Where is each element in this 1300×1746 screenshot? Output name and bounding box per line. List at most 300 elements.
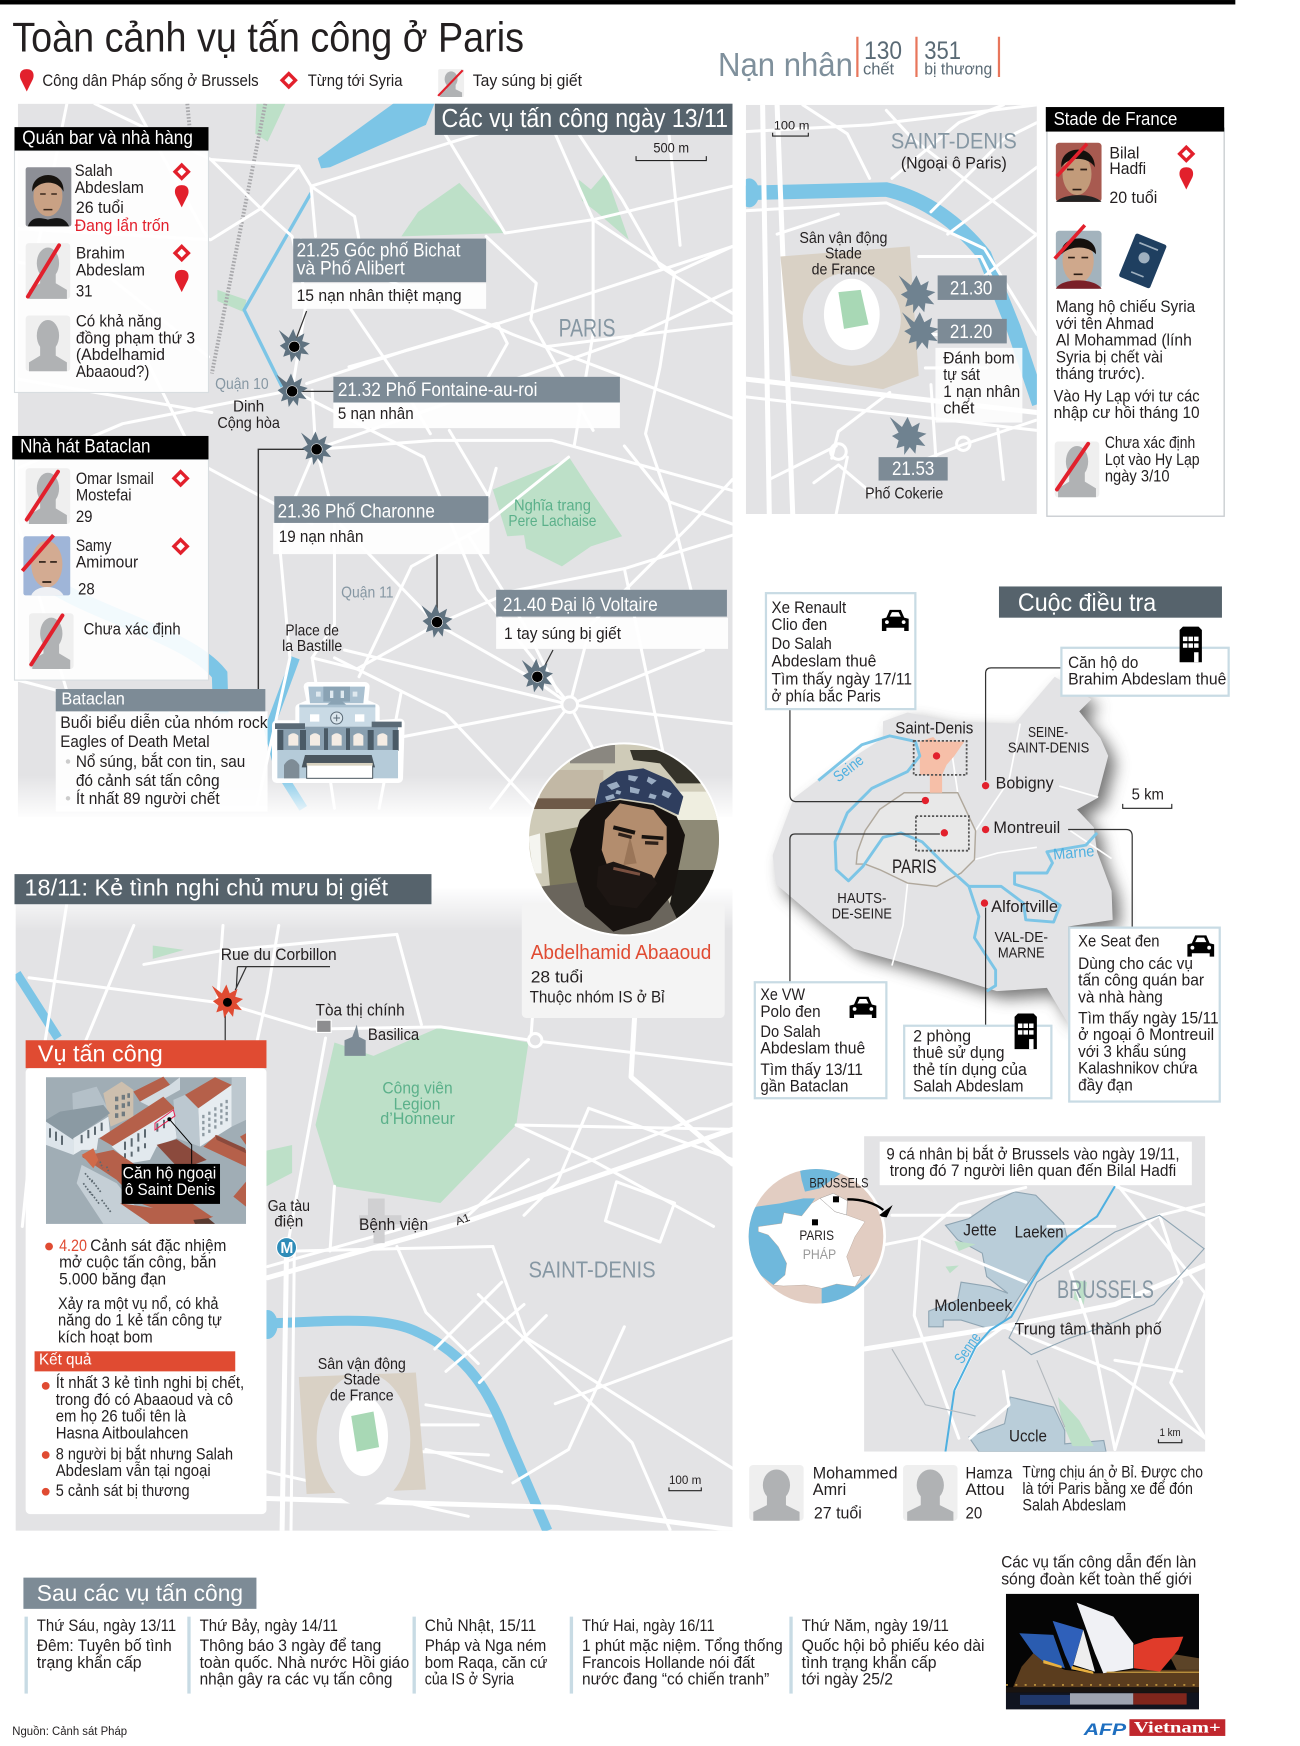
photo: Salah Abdeslam [26, 167, 71, 226]
Rue du Corbillon blast: Rue du Corbillon [221, 945, 337, 964]
photo: Abaaoud [527, 742, 723, 940]
text: Salah Abdeslam: Salah [75, 161, 113, 180]
timeline: Monday: Francois Hollande nói đất [582, 1653, 755, 1672]
labels: Sân vận động [799, 230, 887, 247]
locator globe: BRUSSELS [809, 1174, 869, 1190]
scale 500 m: 500 m [653, 141, 689, 156]
panel: Brussels map [864, 1136, 1205, 1452]
text: passport: Vào Hy Lạp với tư các [1054, 386, 1200, 405]
source: Nguồn: Cảnh sát Pháp [12, 1724, 127, 1738]
text: results: Ít nhất 3 kẻ tình nghi bị chết, [56, 1373, 244, 1392]
name and details: Thuộc nhóm IS ở Bỉ [530, 987, 665, 1006]
labels: Phố Cokerie [865, 485, 943, 502]
panel: bars and restaurants: Quán bar và nhà hàng [22, 128, 193, 149]
blast marker 5 [522, 659, 553, 692]
text: passport: nhập cư hồi tháng 10 [1054, 403, 1200, 422]
subheading: results [35, 1351, 235, 1371]
victims counter: bị thương [924, 60, 992, 79]
panel: Stade de France attackers: Stade de France [1054, 108, 1177, 129]
text: unidentified: ngày 3/10 [1105, 467, 1170, 486]
silhouette: unidentified [1055, 442, 1099, 497]
text: results: Hasna Aitboulahcen [56, 1423, 188, 1442]
text: unidentified: Lọt vào Hy Lạp [1105, 450, 1200, 469]
panel: Bataclan theatre attackers [12, 436, 208, 680]
labels on Saint-Denis map: d’Honneur [380, 1109, 455, 1128]
heading: after the attacks: Sau các vụ tấn công [37, 1580, 243, 1606]
person: Hamza Attou: Hamza [966, 1463, 1013, 1482]
caption: solidarity: sóng đoàn kết toàn thế giới [1001, 1569, 1192, 1588]
icon: metro [277, 1238, 297, 1258]
blast marker 4 [421, 604, 453, 638]
labels: Stade [825, 246, 862, 263]
callout: suicide bombing: chết [943, 399, 975, 418]
logo: AFP Vietnam+ [1082, 1719, 1225, 1739]
labels on Saint-Denis map [268, 1001, 656, 1404]
text: passport: Syria bị chết vài [1056, 347, 1163, 366]
labels: (Ngoại ô Paris) [901, 153, 1007, 172]
blast markers [890, 275, 939, 455]
callout: 21.32: 21.32 Phố Fontaine-au-roi [338, 380, 537, 401]
labels on Saint-Denis map: Stade [343, 1372, 380, 1389]
name and details: 28 tuổi [531, 967, 583, 986]
note: arrests [880, 1142, 1192, 1185]
text: third accomplice: (Abdelhamid [76, 345, 165, 364]
icon: Syria diamond [282, 74, 295, 87]
callout: Bataclan: đó cảnh sát tấn công [76, 771, 220, 790]
labels on Saint-Denis map: điện [274, 1213, 303, 1230]
text: Omar: Mostefai [76, 486, 132, 505]
photo: Sydney Opera House [1006, 1594, 1199, 1709]
labels: Uccle [1009, 1427, 1047, 1446]
illustration: apartment building: ô Saint Denis [125, 1180, 215, 1199]
timeline: Friday [25, 1616, 176, 1694]
map labels: Bobigny [996, 773, 1054, 792]
map labels: PARIS [892, 857, 937, 878]
map labels: PARIS [559, 316, 615, 343]
time labels [879, 275, 1007, 481]
text: passport: tháng trước). [1056, 364, 1145, 383]
text: unidentified: Chưa xác định [1105, 433, 1195, 452]
timeline: Thursday: Quốc hội bỏ phiếu kéo dài [802, 1636, 984, 1655]
text: unidentified: Chưa xác định [84, 619, 181, 638]
timeline: Saturday: Thứ Bảy, ngày 14/11 [200, 1616, 338, 1635]
silhouette: Brahim [26, 243, 70, 299]
callout: suicide bombing: Đánh bom [943, 348, 1015, 367]
timeline: Sunday: Pháp và Nga ném [425, 1636, 546, 1655]
scale 100 m: 100 m [774, 118, 809, 132]
text: results: em họ 26 tuổi tên là [56, 1407, 187, 1426]
person: Mohammed Amri [749, 1463, 898, 1523]
text: Bilal Hadfi: 20 tuổi [1109, 188, 1157, 207]
person: Mohammed Amri: 27 tuổi [814, 1504, 862, 1523]
person: Hamza Attou: Attou [966, 1480, 1005, 1499]
text: Brahim: Brahim [76, 244, 125, 263]
victims counter [718, 37, 999, 84]
heading: 18/11: 18/11: Kẻ tình nghi chủ mưu bị giết [25, 874, 388, 900]
timeline: Saturday: toàn quốc. Nhà nước Hồi giáo [200, 1653, 409, 1672]
labels on Saint-Denis map: Ga tàu [268, 1198, 310, 1215]
panel: the raid [26, 1040, 266, 1514]
timeline: Saturday: nhận gây ra các vụ tấn công [200, 1670, 392, 1689]
callout: Renault Clio: ở phía bắc Paris [772, 686, 881, 705]
text: police raid [45, 1236, 226, 1346]
timeline: Sunday [413, 1616, 547, 1694]
text: results: 8 người bị bắt nhưng Salah [56, 1444, 233, 1463]
panel: Ile-de-France map [773, 668, 1132, 1031]
text: Brahim [76, 244, 145, 301]
callout: Renault Clio: Xe Renault [772, 598, 847, 617]
text: Omar: 29 [76, 507, 93, 526]
callout: VW Polo: gần Bataclan [760, 1077, 848, 1096]
callout: 21.25: và Phố Alibert [297, 258, 405, 279]
labels: Jette [963, 1220, 997, 1239]
callout: Bataclan: Nổ súng, bắt con tin, sau [76, 752, 245, 771]
locator globe: PHÁP [803, 1246, 836, 1262]
timeline: Friday: Đêm: Tuyên bố tình [37, 1636, 172, 1655]
victims counter: chết [863, 60, 895, 79]
text: police raid: 5.000 băng đạn [59, 1269, 166, 1288]
text: Samy: 28 [78, 579, 95, 598]
map labels: DE-SEINE [832, 906, 892, 923]
text: police raid: 4.20 [59, 1236, 87, 1255]
legend text: been to Syria: Từng tới Syria [308, 71, 403, 90]
text: police raid: Xảy ra một vụ nổ, có khả [58, 1294, 219, 1313]
photo: Samy [22, 535, 70, 595]
callout: VW Polo: Do Salah [760, 1022, 821, 1041]
text: results: Abdeslam vẫn tại ngoại [56, 1461, 211, 1480]
text: Hamza note: Salah Abdeslam [1022, 1496, 1126, 1515]
text: police raid: Cảnh sát đặc nhiệm [90, 1236, 226, 1255]
map labels: SEINE- [1028, 724, 1068, 741]
callout: 21.32: 5 nạn nhân [338, 404, 414, 423]
labels: Laeken [1015, 1223, 1064, 1242]
timeline: Friday: Thứ Sáu, ngày 13/11 [37, 1616, 176, 1635]
timeline: Thursday: Thứ Năm, ngày 19/11 [802, 1616, 949, 1635]
callout: Bataclan: Eagles of Death Metal [60, 732, 210, 751]
victims counter: 130 [864, 38, 902, 65]
callout: 21.32 [293, 377, 620, 428]
icon: Samy Syria [174, 540, 187, 553]
text: passport: Mang hộ chiếu Syria [1056, 297, 1196, 316]
callout: two rooms: Salah Abdeslam [913, 1077, 1023, 1096]
text: police raid: năng do 1 kẻ tấn công tự [58, 1311, 222, 1330]
callout: Seat: Kalashnikov chứa [1078, 1059, 1198, 1078]
map labels: Saint-Denis [895, 719, 973, 738]
callout: VW Polo: Abdeslam thuê [760, 1039, 865, 1058]
callout: Renault Clio [766, 593, 915, 709]
callout: Seat: ở ngoại ô Montreuil [1078, 1025, 1214, 1044]
callout: Seat: đầy đạn [1078, 1075, 1133, 1094]
callout: VW Polo: Polo đen [760, 1002, 821, 1021]
map labels: Place de [285, 623, 339, 640]
map header: Các vụ tấn công ngày 13/11 [442, 105, 728, 133]
photo: Ahmad Al Mohammad [1055, 225, 1102, 289]
person: Hamza Attou [903, 1463, 1013, 1523]
labels: BRUSSELS [1057, 1277, 1154, 1304]
text: third accomplice: Abaaoud?) [76, 362, 149, 381]
callout: two rooms: thuê sử dụng [913, 1043, 1005, 1062]
timeline: Monday: nước đang “có chiến tranh” [582, 1670, 769, 1689]
panel: Abaaoud profile [522, 742, 725, 1018]
legend [20, 69, 582, 97]
callout: Bataclan: Ít nhất 89 người chết [76, 789, 220, 808]
text: results: trong đó có Abaaoud và cô [56, 1390, 233, 1409]
scale 1 km: 1 km [1160, 1427, 1181, 1439]
panel: map of Saint-Denis 18/11 [0, 886, 736, 1531]
map labels: MARNE [998, 945, 1045, 962]
callout: suicide bombing: 1 nạn nhân [943, 382, 1020, 401]
text: Brahim: Abdeslam [76, 260, 145, 279]
scale 500 m [636, 141, 706, 161]
labels: SAINT-DENIS [891, 128, 1017, 153]
panel: the raid: Vụ tấn công [38, 1040, 163, 1066]
panel: Stade de France attackers [1046, 107, 1224, 516]
callout: suicide bombing [935, 348, 1022, 423]
map labels: Alfortville [991, 897, 1058, 916]
text: Omar: Omar Ismail [76, 469, 154, 488]
icon: Omar Syria [174, 472, 187, 485]
name and details: Abdelhamid Abaaoud [531, 942, 711, 964]
callout: Brahim apartment: Brahim Abdeslam thuê [1068, 670, 1226, 689]
text: unidentified [1105, 433, 1200, 486]
text: third accomplice: Có khả năng [76, 312, 162, 331]
callout: Bataclan: Buổi biểu diễn của nhóm rock [60, 713, 268, 732]
text: Samy: Amimour [76, 553, 139, 572]
text: passport [1054, 297, 1200, 422]
text: Salah Abdeslam: Abdeslam [75, 178, 144, 197]
text: passport: Al Mohammad (lính [1056, 331, 1192, 350]
timeline: Saturday [187, 1616, 409, 1694]
icon: metro: M [280, 1240, 293, 1257]
callout: Seat: Xe Seat đen [1078, 932, 1160, 951]
name and details [530, 942, 711, 1006]
scale 5 km: 5 km [1132, 786, 1164, 803]
person: Mohammed Amri: Amri [813, 1480, 846, 1499]
icons: Bilal [1179, 147, 1193, 190]
fade [0, 886, 736, 931]
top bar [0, 0, 1235, 4]
text: Brahim: 31 [76, 282, 93, 301]
labels [799, 128, 1017, 502]
callout: Bataclan [56, 689, 268, 812]
labels on Saint-Denis map: Sân vận động [318, 1356, 406, 1373]
map labels: Pere Lachaise [508, 513, 596, 530]
callout: VW Polo: Tìm thấy 13/11 [760, 1060, 863, 1079]
panel: bars and restaurants [14, 127, 208, 392]
person: Hamza Attou: 20 [966, 1504, 982, 1523]
text: Bilal Hadfi: Bilal [1109, 143, 1139, 162]
title: Toàn cảnh vụ tấn công ở Paris [12, 14, 524, 60]
callout: Seat: và nhà hàng [1078, 987, 1163, 1006]
text: Hamza note [1022, 1462, 1203, 1515]
callout: two rooms: 2 phòng [913, 1026, 971, 1045]
callout: Renault Clio: Tìm thấy ngày 17/11 [772, 670, 912, 689]
map labels: SAINT-DENIS [1008, 740, 1089, 757]
labels on Saint-Denis map: de France [330, 1387, 394, 1404]
icon: red pin [20, 69, 34, 91]
icons: Brahim [175, 246, 189, 292]
callout: 21.25: 15 nạn nhân thiệt mạng [297, 286, 462, 305]
text: Salah Abdeslam [75, 161, 169, 235]
scale 5 km [1123, 786, 1172, 808]
text: police raid: mở cuộc tấn công, bắn [59, 1253, 216, 1272]
callout: Renault Clio: Do Salah [772, 634, 832, 653]
icon: gunman killed [438, 69, 464, 97]
labels: Trung tâm thành phố [1015, 1320, 1162, 1339]
labels on Saint-Denis map: Công viên [382, 1079, 453, 1098]
timeline: Sunday: Chủ Nhật, 15/11 [425, 1616, 536, 1635]
map labels: VAL-DE- [995, 929, 1048, 946]
map labels: Seine [830, 752, 867, 786]
caption: solidarity [1001, 1553, 1196, 1588]
photo: Bilal Hadfi [1056, 143, 1102, 202]
text: results [42, 1373, 244, 1500]
map labels: Dinh [233, 398, 264, 415]
labels on Saint-Denis map: Bệnh viện [359, 1215, 428, 1234]
callout: 21.36 [273, 496, 489, 611]
map labels: la Bastille [282, 638, 342, 655]
person: Mohammed Amri: Mohammed [813, 1463, 898, 1482]
fade [0, 775, 736, 819]
callout: Brahim apartment: Căn hộ do [1068, 653, 1138, 672]
callout: two rooms: thẻ tín dụng của [913, 1060, 1028, 1079]
subheading: results: Kết quả [39, 1352, 92, 1369]
heading: investigation: Cuộc điều tra [1018, 590, 1157, 617]
callout: Renault Clio: Abdeslam thuê [772, 652, 876, 671]
time labels: 21.30 [950, 278, 992, 299]
leader lines [790, 668, 1132, 1026]
text: Samy [76, 536, 139, 598]
panel: Stade de France map [739, 105, 1039, 514]
timeline: Friday: trạng khẩn cấp [37, 1653, 142, 1672]
text: passport: với tên Ahmad [1056, 314, 1154, 333]
text: Hamza note: Từng chịu án ở Bỉ. Được cho [1022, 1462, 1203, 1481]
timeline: Monday: 1 phút mặc niệm. Tổng thống [582, 1636, 783, 1655]
callout: 21.40: 1 tay súng bị giết [504, 624, 621, 643]
callout: Seat [1069, 928, 1220, 1102]
map labels: Quận 10 [215, 376, 269, 393]
labels: Senne [952, 1330, 985, 1367]
timeline: Thursday [789, 1616, 984, 1694]
time labels: 21.20 [950, 322, 992, 343]
logo: AFP Vietnam+: Vietnam+ [1134, 1720, 1221, 1737]
logo: AFP Vietnam+: AFP [1082, 1720, 1127, 1739]
illustration: apartment building: Căn hộ ngoại [123, 1163, 216, 1182]
callout: Seat: tấn công quán bar [1078, 971, 1205, 990]
heading: investigation [999, 586, 1222, 618]
text: Bilal Hadfi [1109, 143, 1157, 207]
blast marker 1 [279, 329, 310, 362]
callout: Brahim apartment [1061, 627, 1229, 696]
callout: 21.40 [496, 590, 728, 673]
labels: de France [812, 261, 875, 278]
timeline: Sunday: của IS ở Syria [425, 1670, 515, 1689]
blast marker 3 [301, 431, 332, 465]
locator globe [746, 1166, 887, 1307]
timeline: Thursday: tới ngày 25/2 [802, 1670, 893, 1689]
illustration: apartment building [46, 1077, 246, 1224]
labels on Saint-Denis map: SAINT-DENIS [528, 1257, 656, 1283]
text: third accomplice [76, 312, 195, 381]
callout: two rooms [904, 1013, 1051, 1098]
time labels: 21.53 [892, 459, 934, 480]
silhouette: Omar [26, 468, 70, 524]
text: Bilal Hadfi: Hadfi [1109, 159, 1146, 178]
callout: Renault Clio: Clio đen [772, 615, 827, 634]
timeline: Thursday: tình trạng khẩn cấp [802, 1653, 937, 1672]
labels on Saint-Denis map: Basilica [368, 1025, 420, 1044]
map labels [215, 316, 615, 655]
labels on Saint-Denis map: A1 [454, 1212, 472, 1228]
icons: Salah [175, 165, 189, 207]
timeline: Monday [570, 1616, 783, 1694]
arrow: France to Brussels [847, 1199, 893, 1217]
victims counter: 351 [924, 38, 961, 65]
location dots [922, 752, 989, 907]
callout: VW Polo: Xe VW [760, 985, 805, 1004]
map labels: Cộng hòa [217, 415, 280, 432]
callout: 21.25 [292, 239, 486, 338]
labels on Saint-Denis map: Legion [394, 1094, 440, 1113]
legend text: gunman killed: Tay súng bị giết [473, 71, 582, 90]
text: third accomplice: đồng phạm thứ 3 [76, 328, 195, 347]
callout: 21.36: 19 nạn nhân [279, 527, 363, 546]
text: results: 5 cảnh sát bị thương [56, 1481, 190, 1500]
labels [934, 1220, 1162, 1446]
text: Samy: Samy [76, 536, 112, 555]
text: Salah Abdeslam: 26 tuổi [76, 198, 124, 217]
silhouette: third accomplice [26, 316, 70, 371]
icon: passport [1119, 233, 1167, 289]
timeline: Monday: Thứ Hai, ngày 16/11 [582, 1616, 715, 1635]
map labels: HAUTS- [837, 890, 886, 907]
blast marker 2 [277, 374, 308, 407]
callout: Seat: Tìm thấy ngày 15/11 [1078, 1009, 1219, 1028]
map labels: Quận 11 [341, 585, 394, 602]
text: Omar [76, 469, 154, 526]
icon: Bataclan building [275, 687, 402, 778]
timeline: Saturday: Thông báo 3 ngày để tang [200, 1636, 381, 1655]
victims counter: Nạn nhân [718, 47, 853, 84]
callout: 21.36: 21.36 Phố Charonne [278, 501, 435, 522]
text: police raid: kích hoạt bom [58, 1327, 153, 1346]
note: arrests: trong đó 7 người liên quan đến Bilal Hadfi [890, 1162, 1176, 1180]
labels on Saint-Denis map: Tòa thị chính [316, 1001, 405, 1020]
caption: solidarity: Các vụ tấn công dẫn đến làn [1001, 1553, 1196, 1572]
labels: Molenbeek [934, 1296, 1013, 1315]
timeline: Sunday: bom Raqa, căn cứ [425, 1653, 547, 1672]
scale 1 km [1158, 1427, 1182, 1443]
leader to Bataclan [258, 449, 307, 689]
map labels: Nghĩa trang [514, 498, 591, 515]
silhouette: unidentified [29, 613, 74, 669]
callout: Bataclan: Bataclan [61, 689, 125, 709]
note: arrests: 9 cá nhân bị bắt ở Brussels vào ngày 19/11, [886, 1145, 1180, 1164]
callout: 21.40: 21.40 Đại lộ Voltaire [503, 595, 658, 616]
legend text: French citizen in Brussels: Công dân Pháp sống ở Brussels [42, 71, 259, 90]
text: Salah Abdeslam: Đang lẩn trốn [75, 216, 169, 235]
callout: Seat: Dùng cho các vụ [1078, 954, 1193, 973]
text: Hamza note: là tới Paris bằng xe để đón [1022, 1479, 1193, 1498]
panel: Bataclan theatre attackers: Nhà hát Bataclan [20, 437, 151, 458]
panel: map of 13/11 attacks [0, 103, 736, 819]
map labels: Montreuil [993, 818, 1060, 837]
map labels [830, 719, 1095, 962]
callout: 21.25: 21.25 Góc phố Bichat [297, 240, 461, 261]
callout: VW Polo [755, 982, 886, 1098]
callout: Seat: với 3 khẩu súng [1078, 1042, 1186, 1061]
scale 100 m: 100 m [669, 1473, 701, 1487]
